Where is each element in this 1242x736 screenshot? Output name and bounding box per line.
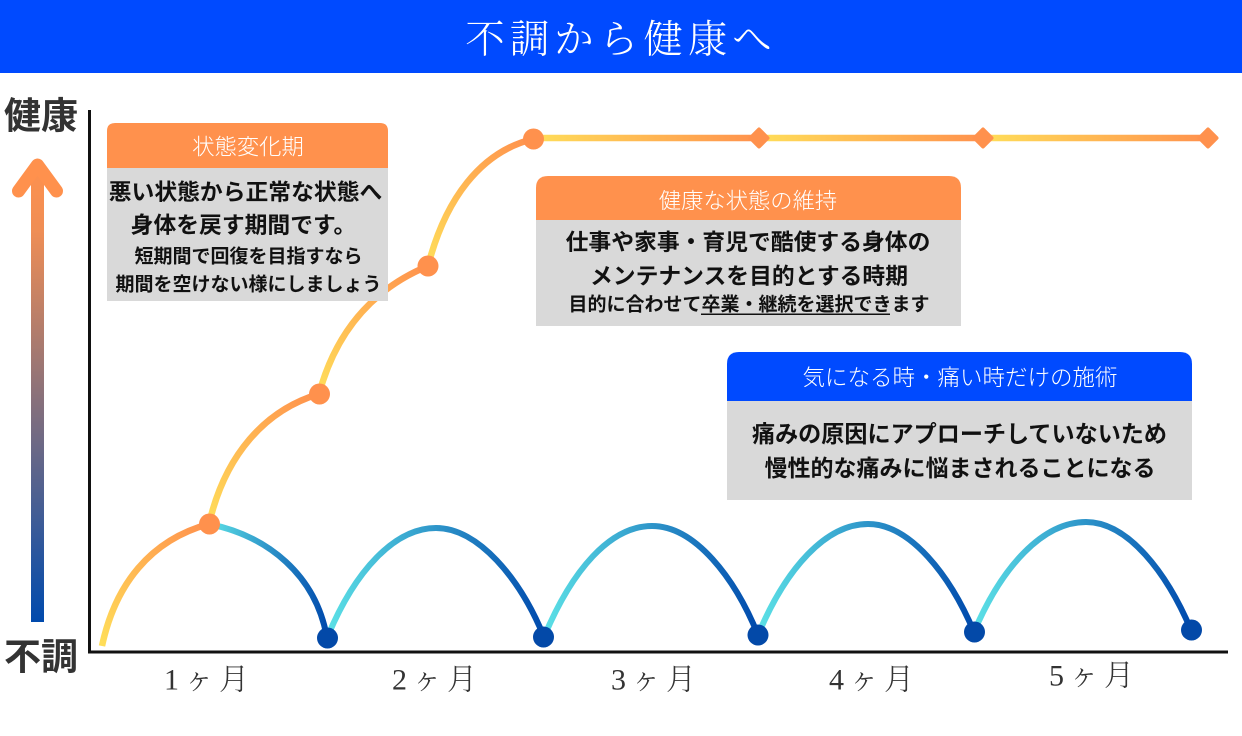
panel: maintaining health <box>536 176 961 326</box>
chart axes <box>88 110 1228 652</box>
title banner: 不調から健康へ <box>465 18 777 62</box>
x-axis month labels: 4ヶ月 <box>829 664 914 696</box>
title banner <box>0 0 1242 73</box>
panel: transition period: 悪い状態から正常な状態へ <box>109 179 382 205</box>
axis label: poor condition: 不調 <box>4 636 78 678</box>
panel: symptomatic treatment only: 気になる時・痛い時だけの施術 <box>802 366 1118 390</box>
panel: transition period: 状態変化期 <box>192 134 304 160</box>
panel: maintaining health: 目的に合わせて卒業・継続を選択できます <box>568 294 930 316</box>
x-axis month labels: 2ヶ月 <box>392 664 477 696</box>
recurring pain curve <box>209 522 1191 638</box>
panel: symptomatic treatment only <box>727 352 1192 500</box>
panel: transition period: 期間を空けない様にしましょう <box>115 274 382 296</box>
x-axis month labels <box>164 660 1134 696</box>
panel: symptomatic treatment only: 慢性的な痛みに悩まされることになる <box>764 455 1156 481</box>
panel: transition period <box>107 123 388 301</box>
panel: maintaining health: メンテナンスを目的とする時期 <box>590 263 908 289</box>
recovery curve <box>102 138 1208 646</box>
panel: maintaining health: 仕事や家事・育児で酷使する身体の <box>566 229 930 255</box>
blue low-point markers <box>317 620 1202 648</box>
panel: transition period: 短期間で回復を目指すなら <box>134 246 363 268</box>
panel: symptomatic treatment only: 痛みの原因にアプローチしていないため <box>752 421 1167 447</box>
orange milestone markers <box>199 127 1219 535</box>
x-axis month labels: 5ヶ月 <box>1049 660 1134 692</box>
panel: transition period: 身体を戻す期間です。 <box>131 212 356 238</box>
panel: maintaining health: 健康な状態の維持 <box>659 188 837 214</box>
axis label: health: 健康 <box>4 96 78 136</box>
x-axis month labels: 1ヶ月 <box>164 664 249 696</box>
gradient arrow <box>18 165 56 622</box>
x-axis month labels: 3ヶ月 <box>611 664 696 696</box>
